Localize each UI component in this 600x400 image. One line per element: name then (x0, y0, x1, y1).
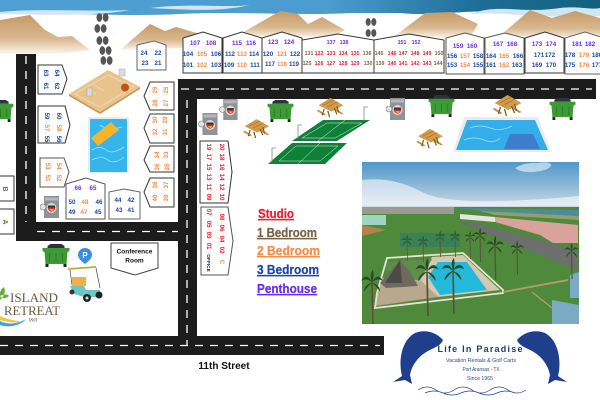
building: units 08-office: 06 (218, 225, 225, 232)
building: units 181-175: 178 (565, 52, 576, 59)
building: units 32-29: 32 (152, 128, 159, 135)
legend: Studio (258, 206, 294, 221)
building: units 60-55: 60 (55, 113, 62, 120)
building: units 20-09: 11 (205, 184, 212, 191)
building: units 115-109: 114 (249, 51, 260, 58)
building: units 137-125: 129 (351, 61, 359, 67)
building: units 181-175: 179 (579, 52, 590, 59)
building: units 173-169 (525, 32, 564, 73)
building: units 181-175 (565, 32, 600, 74)
building: units 26-25: 26 (152, 86, 159, 93)
building: units 167-161: 161 (486, 62, 497, 69)
building: units 173-169: 174 (546, 41, 557, 48)
building: units 66-45: 45 (95, 209, 102, 216)
building: units 167-161: 164 (486, 53, 497, 60)
building: units 32-29: 30 (152, 116, 159, 123)
logo: Life In Paradise (393, 331, 567, 395)
logo: Island Retreat: ISLAND (10, 291, 58, 305)
building: units 08-office: 08 (218, 214, 225, 221)
building: units 40-37: 39 (163, 194, 170, 201)
building: units 32-29: 29 (162, 116, 169, 123)
building: units 64-61: 64 (53, 70, 60, 77)
building: units 66-45 (66, 178, 105, 219)
building: units 66-45: 65 (90, 185, 97, 192)
icon: right dolphin (517, 331, 567, 384)
pool: left (88, 117, 129, 173)
conference room sign: Room (125, 258, 144, 264)
founding year: Since 1965 (467, 376, 493, 382)
building: units 151-139: 144 (434, 61, 442, 67)
building: units 115-109: 115 (232, 40, 243, 47)
building: units 137-125: 130 (364, 61, 372, 67)
brand name: Life In Paradise (438, 344, 522, 354)
building: units 137-125: 136 (363, 51, 371, 57)
building: units 107-101: 106 (211, 51, 222, 58)
building: units 20-09: 17 (205, 154, 212, 161)
building: units 151-139: 145 (375, 51, 383, 57)
building: units 66-45: 46 (96, 199, 103, 206)
building: units 181-175: 182 (585, 41, 596, 48)
pool deck (420, 255, 500, 297)
building: units 36-33 (144, 146, 174, 172)
building: units 64-61: 62 (53, 83, 60, 90)
building: units 151-139 (374, 34, 444, 73)
legend: 1 Bedroom (257, 225, 317, 240)
icon: left dolphin (393, 331, 443, 384)
building: units 107-101: 108 (206, 40, 217, 47)
building: units 60-55: 55 (43, 136, 50, 143)
building: units 159-153: 157 (460, 53, 471, 60)
building: units 137-125: 138 (340, 40, 348, 46)
building: units 32-29: 31 (162, 128, 169, 135)
building: units 115-109: 111 (250, 62, 260, 69)
building: units 20-09: 15 (205, 164, 212, 171)
building: units 20-09: 18 (218, 154, 225, 161)
building: units 66-45: 50 (69, 199, 76, 206)
building: units 64-61 (38, 65, 67, 94)
building: units 123-117: 119 (289, 61, 300, 68)
building: units 20-09: 20 (218, 144, 225, 151)
building: units 40-37: 38 (152, 181, 159, 188)
building: units 24-21: 24 (141, 50, 148, 57)
building: units 107-101: 103 (211, 62, 222, 69)
building: units 36-33: 33 (163, 151, 170, 158)
building: units 36-33: 34 (154, 151, 161, 158)
building: units 151-139: 147 (399, 51, 407, 57)
building: units 137-125: 126 (315, 61, 323, 67)
building: units 151-139: 149 (423, 51, 431, 57)
building: units 159-153: 153 (447, 62, 458, 69)
building: units 159-153: 159 (453, 43, 464, 50)
building: units 107-101: 102 (197, 62, 208, 69)
building: units 08-office: C (218, 260, 225, 265)
building: units 107-101 (183, 32, 222, 73)
tennis courts (268, 107, 370, 164)
waves (418, 387, 526, 395)
building: units 159-153: 158 (473, 53, 484, 60)
legend (257, 206, 320, 296)
building: units 20-09 (200, 141, 232, 203)
swimming pool (428, 262, 487, 295)
building: units 24-21: 23 (142, 60, 149, 67)
building: units 44-41 (109, 189, 140, 219)
laundry machines (40, 98, 405, 218)
building: units 151-139: 142 (411, 61, 419, 67)
sign: B (0, 176, 14, 201)
logo: Island Retreat (0, 287, 60, 326)
building: units 08-office: 01 (205, 243, 212, 250)
street label: 11th Street (198, 361, 250, 372)
building: units 24-21: 22 (155, 50, 162, 57)
building: units 159-153: 155 (473, 62, 484, 69)
building: units 123-117: 118 (277, 61, 288, 68)
building: units 115-109: 116 (246, 40, 257, 47)
sign: A: A (1, 219, 8, 225)
building: units 173-169: 171 (534, 52, 545, 59)
building: units 20-09: 13 (205, 174, 212, 181)
building: units 137-125: 135 (351, 51, 359, 57)
building: units 151-139: 152 (412, 40, 420, 46)
building: units 26-25: 27 (163, 99, 170, 106)
building: units 167-161: 166 (513, 53, 524, 60)
building: units 66-45: 47 (81, 209, 88, 216)
building: units 167-161 (485, 33, 524, 74)
building: units 08-office: OFFICE (205, 254, 211, 273)
building: units 60-55: 56 (55, 136, 62, 143)
footprints (94, 13, 376, 65)
building: units 107-101: 105 (197, 51, 208, 58)
building: units 60-55: 58 (55, 125, 62, 132)
building: units 123-117 (262, 32, 302, 73)
sign: A (0, 209, 14, 234)
building: units 54-51: 52 (55, 175, 62, 182)
building: units 151-139: 146 (388, 51, 396, 57)
photo: aerial view of pool (361, 162, 579, 324)
building: units 20-09: 19 (205, 144, 212, 151)
building: units 54-51: 53 (44, 163, 51, 170)
conference room sign: Conference (117, 248, 153, 256)
building: units 66-45: 66 (75, 185, 82, 192)
building: units 54-51 (40, 158, 69, 187)
building: units 167-161: 162 (499, 62, 510, 69)
building: units 123-117: 122 (290, 51, 301, 58)
conference room sign (111, 243, 158, 275)
building: units 137-125: 134 (339, 51, 347, 57)
sky banner (0, 0, 600, 17)
building: units 20-09: 12 (218, 184, 225, 191)
building: units 115-109 (223, 32, 262, 73)
building: units 137-125: 125 (303, 61, 311, 67)
building: units 123-117: 120 (263, 51, 274, 58)
building: units 60-55 (38, 106, 70, 143)
building: units 173-169: 169 (532, 62, 543, 69)
building: units 123-117: 117 (265, 61, 276, 68)
building: units 181-175: 176 (579, 62, 590, 69)
sign: B: B (1, 186, 8, 192)
parking marker: P (82, 251, 88, 260)
basketball court (69, 69, 140, 114)
tagline: Vacation Rentals & Golf Carts (446, 358, 517, 364)
building: units 44-41: 44 (115, 197, 122, 204)
building: units 173-169: 173 (532, 41, 543, 48)
building: units 20-09: 09 (205, 194, 212, 201)
building: units 137-125 (302, 34, 374, 73)
building: units 26-25: 28 (152, 99, 159, 106)
dumpsters (0, 95, 575, 267)
building: units 44-41: 43 (116, 207, 123, 214)
building: units 115-109: 110 (237, 62, 248, 69)
building: units 181-175: 175 (565, 62, 576, 69)
building: units 40-37 (144, 178, 174, 207)
building: units 107-101: 104 (183, 51, 194, 58)
building: units 20-09: 10 (218, 194, 225, 201)
building: units 115-109: 112 (225, 51, 236, 58)
building: units 107-101: 107 (190, 40, 201, 47)
pool: right (453, 117, 551, 152)
picnic tables (243, 95, 522, 148)
building: units 167-161: 167 (493, 41, 504, 48)
building: units 151-139: 140 (388, 61, 396, 67)
roads (0, 54, 596, 355)
building: units 137-125: 127 (327, 61, 335, 67)
building: units 123-117: 124 (284, 39, 295, 46)
mountains (0, 10, 600, 54)
building: units 167-161: 165 (499, 53, 510, 60)
location: Port Aransas - TX (462, 367, 500, 373)
building: units 159-153: 160 (467, 43, 478, 50)
building: units 159-153: 156 (447, 53, 458, 60)
building: units 115-109: 109 (224, 62, 235, 69)
building: units 167-161: 168 (507, 41, 518, 48)
building: units 66-45: 49 (69, 209, 76, 216)
building: units 137-125: 137 (327, 40, 335, 46)
building: units 26-25 (144, 82, 174, 110)
building: units 08-office: 02 (218, 247, 225, 254)
building: units 64-61: 61 (42, 83, 49, 90)
building: units 137-125: 132 (315, 51, 323, 57)
building: units 40-37: 40 (152, 194, 159, 201)
building: units 60-55: 59 (43, 113, 50, 120)
building: units 26-25: 25 (163, 86, 170, 93)
building: units 151-139: 150 (435, 51, 443, 57)
building: units 151-139: 143 (423, 61, 431, 67)
building: units 151-139: 151 (398, 40, 406, 46)
building: units 137-125: 133 (327, 51, 335, 57)
building: units 107-101: 101 (183, 62, 194, 69)
building: units 137-125: 128 (339, 61, 347, 67)
building: units 54-51: 51 (44, 175, 51, 182)
building: units 151-139: 141 (399, 61, 407, 67)
building: units 151-139: 139 (376, 61, 384, 67)
building: units 159-153: 154 (460, 62, 471, 69)
building: units 54-51: 54 (55, 163, 62, 170)
building: units 181-175: 181 (572, 41, 583, 48)
building: units 32-29 (144, 114, 174, 143)
building: units 40-37: 37 (163, 181, 170, 188)
building: units 24-21 (137, 41, 166, 70)
building: units 08-office: 07 (205, 209, 212, 216)
building: units 167-161: 163 (512, 62, 523, 69)
golf cart (68, 267, 102, 302)
building: units 151-139: 148 (411, 51, 419, 57)
building: units 24-21: 21 (155, 60, 162, 67)
parking marker (78, 248, 92, 264)
building: units 66-45: 48 (82, 199, 89, 206)
building: units 44-41: 41 (128, 207, 135, 214)
building: units 36-33: 36 (154, 163, 161, 170)
legend: 2 Bedroom (257, 243, 320, 258)
building: units 08-office: 03 (205, 232, 212, 239)
logo: Island Retreat: RETREAT (4, 303, 60, 318)
building: units 159-153 (446, 33, 484, 74)
building: units 173-169: 170 (546, 62, 557, 69)
building: units 173-169: 172 (545, 52, 556, 59)
building: units 08-office: 05 (205, 221, 212, 228)
building: units 123-117: 123 (268, 39, 279, 46)
building: units 08-office (201, 207, 233, 275)
building: units 08-office: 04 (218, 236, 225, 243)
legend: Penthouse (257, 281, 317, 296)
logo: Island Retreat: I&II (29, 318, 38, 324)
building: units 20-09: 16 (218, 164, 225, 171)
building: units 44-41: 42 (128, 197, 135, 204)
building: units 115-109: 113 (237, 51, 248, 58)
building: units 36-33: 35 (164, 163, 171, 170)
building: units 60-55: 57 (43, 125, 50, 132)
building: units 137-125: 131 (305, 51, 313, 57)
legend: 3 Bedroom (257, 262, 319, 277)
building: units 64-61: 63 (42, 70, 49, 77)
building: units 123-117: 121 (277, 51, 288, 58)
building: units 20-09: 14 (218, 174, 225, 181)
